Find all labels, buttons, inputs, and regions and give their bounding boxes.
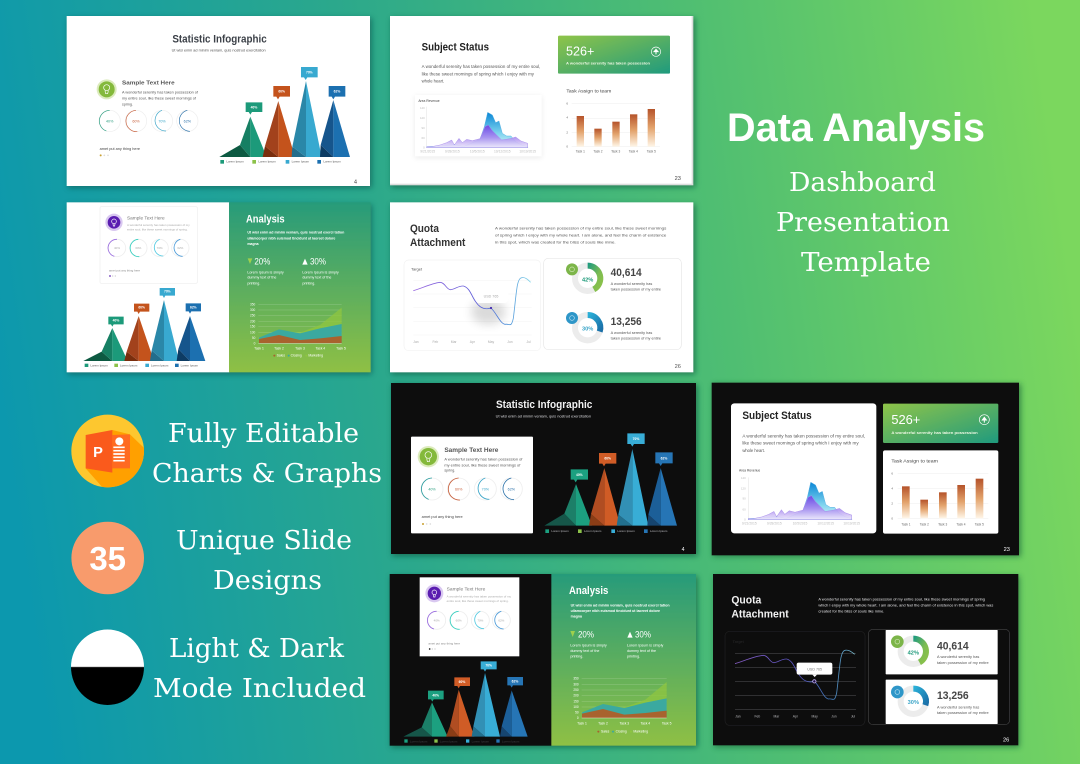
right panel [551,574,696,746]
sample card: 62% [498,618,505,622]
legend [404,739,520,743]
paragraph: A wonderful serenity has taken possession of my entire soul, like these sweet mornings of spring [818,598,985,602]
stat card [883,404,998,443]
area chart card [415,95,542,158]
subheading: Presentation [776,208,950,238]
subtitle: Ut wisi enim ad minim veniam, quis nostrud exercitation [172,49,266,53]
stat: 30%: Lorem Ipsum is simply [302,270,339,274]
bar chart: Task 3 [611,150,620,154]
legend [220,160,341,164]
white content card: 140 [741,476,746,480]
right panel [229,202,371,372]
white card: Sample Text Here [444,448,499,454]
area chart: 150 [250,325,256,329]
sample card: 62% [177,246,184,250]
legend: Lorem Ipsum [551,529,569,533]
stat: 30%: printing. [627,655,640,659]
area chart card: Area Revenue [418,99,440,103]
sample card: amet put any thing here [428,642,460,646]
white card: 70% [482,487,490,491]
donut stats card: A wonderful serenity has [611,331,653,335]
paragraph [495,225,667,245]
legend: Lorem Ipsum [323,160,341,164]
stat card: 526+ [566,43,594,58]
donut stats card: 30% [582,326,593,332]
white content card: 10/5/2015 [793,522,808,526]
feature text: unique slides [176,526,352,596]
line chart card: Jan [413,340,419,344]
paragraph: which I enjoy with my whole heart. I am alone, and feel the charm of existence in this spot, which was [818,604,993,608]
bar chart: 2 [566,130,568,134]
page number: 4 [354,180,357,186]
area chart: 50 [575,710,579,714]
white content card: A wonderful serenity has taken possession of my entire soul, [742,433,865,438]
line chart card: Jul [851,714,855,718]
area chart: 0 [577,716,579,720]
stat: 30%: dummy text of the [627,649,656,653]
slide: Subject Status light [390,16,695,187]
feature text: editable charts: Charts & Graphs [152,459,382,489]
caption with dots [100,147,140,156]
legend [545,529,668,533]
feature text: light and dark: Light & Dark [169,634,344,664]
white content card: Subject Status [742,410,812,422]
area chart: Task 5 [336,346,346,350]
text block: sample text: Sample Text Here [122,81,175,87]
line chart card: Apr [793,714,799,718]
legend: Lorem Ipsum [258,160,276,164]
white card: amet put any thing here [422,515,463,519]
title: Attachment [410,237,466,249]
sample card: A wonderful serenity has taken possession of my [127,223,190,227]
area chart: Task 2 [598,722,608,726]
area chart: Task 1 [254,346,264,350]
donut stats card: 13,256 [611,316,642,328]
bar chart: Task Assign to team [566,89,611,95]
bar chart: Task 1 [576,150,585,154]
area chart: Sales [277,354,285,358]
donut stats card: taken possession of my entire [611,337,661,341]
white card [411,437,533,533]
text block: sample text: my entire soul, like these sweet mornings of [122,96,197,100]
donut stats frame: A wonderful serenity has [937,705,980,709]
text block: sample text: spring. [122,102,133,106]
title: Attachment [731,608,789,620]
stat: 20% [247,257,284,285]
area chart: 100 [250,330,256,334]
donut stats frame: taken possession of my entire [937,661,989,665]
bar chart: 4 [566,116,568,120]
pyramid chart [544,433,677,526]
area chart: Marketing [308,354,323,358]
line chart card: Mar [451,340,457,344]
slide: Statistic Infographic light [67,16,372,188]
area chart: 200 [573,694,579,698]
stat card: A wonderful serenity has taken possession [566,61,651,66]
donut stats card: A wonderful serenity has [611,282,653,286]
line chart card: Feb [754,714,760,718]
feature text: unique slides: Designs [213,566,322,596]
area chart card: 9/28/2015 [445,150,460,154]
stat: 20%: 20% [578,629,594,639]
line chart card: Feb [432,340,438,344]
area chart card: 60 [422,136,425,140]
white card: 60% [455,487,463,491]
slide: Analysis dark [390,574,698,747]
area chart: Sales [601,730,610,734]
sample card [420,577,519,656]
main heading: Data Analysis [727,106,985,150]
legend: Lorem Ipsum [181,363,199,367]
area chart: 300 [573,683,579,687]
area chart card: 90 [422,126,425,130]
white content card: 9/21/2015 [742,522,757,526]
paragraph [422,64,540,83]
title: Quota [410,223,440,235]
pyramid chart: 62% [334,90,340,94]
line chart card: Mar [773,714,780,718]
title: Statistic Infographic [496,399,592,411]
line chart card: Jan [735,714,741,718]
pyramid chart: 60% [278,90,285,94]
stat card: A wonderful serenity has taken possession [891,430,978,435]
caption with dots: amet put any thing here [100,147,140,151]
white content card: 0 [744,518,746,522]
pyramid chart: 70% [306,70,313,74]
bar chart: Task 2 [593,150,603,154]
pyramid chart: 60% [459,680,465,684]
sample card: 70% [477,618,484,622]
stat: 30%: Lorem Ipsum is simply [627,644,664,648]
pyramid chart: 62% [661,456,667,460]
area chart card: 0 [423,146,425,150]
stat: 20%: printing. [247,281,260,285]
page number: 4 [682,547,685,553]
white card: my entire soul, like these sweet mornings of [444,463,521,467]
area chart: Task 4 [641,722,650,726]
bar chart: 0 [566,144,568,148]
slide: Statistic Infographic dark [391,383,698,556]
heading: Analysis: Analysis [246,214,285,226]
slide: Subject Status dark [712,383,1021,557]
analysis paragraph [247,231,344,246]
white card: spring. [444,469,455,473]
progress rings [99,110,198,132]
donut stats card: taken possession of my entire [611,288,661,292]
white content card: 10/19/2015 [843,522,860,526]
line chart card [725,631,865,725]
white card: 40% [428,487,436,491]
stat: 30%: printing. [302,281,315,285]
area chart: Task 3 [620,722,629,726]
bar chart card: Task 5 [975,522,984,526]
subheading: Dashboard [789,168,936,198]
stat card: 526+ [891,412,921,427]
stat: 20%: Lorem Ipsum is simply [570,644,607,648]
stat card [558,36,670,74]
legend: Lorem Ipsum [584,529,602,533]
pyramid chart: 60% [604,457,611,461]
pyramid chart: 60% [138,306,145,310]
pyramid chart: 62% [190,305,197,309]
page number: 26 [1003,738,1009,744]
text block: sample text [122,81,199,106]
paragraph: in this spot, which was created for the bliss of souls like mine. [495,240,616,245]
donut stats frame: 30% [908,700,919,706]
legend: Lorem Ipsum [502,739,520,743]
area chart: Task 1 [577,722,587,726]
title: Subject Status [422,42,489,54]
white content card: like these sweet mornings of spring which I enjoy with my [742,441,860,446]
title: Quota [731,595,762,607]
line chart card [404,260,541,351]
pyramid chart: 40% [251,105,257,109]
line chart card: May [488,340,494,344]
area chart: Closing [616,730,627,734]
donut stats card: 42% [582,277,593,283]
progress rings: 40% [106,119,114,123]
bar chart card: Task 2 [920,522,929,526]
legend: Lorem Ipsum [410,739,428,743]
legend: Lorem Ipsum [151,363,169,367]
area chart: 200 [250,319,256,323]
paragraph: like these sweet mornings of spring which I enjoy with my [422,71,535,76]
icon: 35 badge [71,522,144,594]
area chart card: 120 [420,116,425,120]
title [410,223,466,249]
white card: 62% [508,487,516,491]
legend: Lorem Ipsum [292,160,310,164]
donut stats frame: A wonderful serenity has [937,655,980,659]
area chart card: 10/19/2015 [519,150,536,154]
icon: 35 badge: 35 [89,540,126,577]
page number: 26 [675,364,681,370]
sample card: Sample Text Here [447,586,486,592]
legend [85,363,199,367]
white content card: whole heart. [742,448,765,453]
feature text: editable charts [152,419,382,489]
legend: Lorem Ipsum [472,739,490,743]
area chart: 350 [573,677,579,681]
pyramid chart: 70% [633,437,639,441]
title: Statistic Infographic [172,33,267,45]
area chart: 300 [250,308,256,312]
area chart: Marketing [633,730,648,734]
line chart card: Jun [507,340,513,344]
analysis paragraph: Ut wisi enim ad minim veniam, quis nostrud exerci tation [571,603,670,607]
sample card: entire soul, like these sweet mornings of spring. [127,227,188,231]
analysis paragraph: ullamcorper nibh euismod tincidunt ut laoreet dolore [571,609,660,613]
area chart: 0 [254,341,256,345]
line chart card: USD 765 [484,295,498,299]
area chart: 350 [250,302,256,306]
stat: 30%: dummy text of the [302,276,331,280]
sample card: 40% [434,618,440,622]
stat: 20%: 20% [254,257,270,267]
line chart card: May [812,714,818,718]
bar chart card: 6 [891,472,893,476]
subheading [776,168,950,278]
page number: 23 [1004,547,1010,553]
paragraph: whole heart. [422,78,444,83]
area chart: Task 3 [295,346,305,350]
area chart: Task 2 [274,346,284,350]
line chart card: Target [411,266,423,271]
line chart card: Jul [527,340,531,344]
feature text: light and dark [153,634,366,704]
stat: 30% [302,257,339,285]
pyramid chart: 62% [512,680,518,684]
pyramid chart: 40% [113,319,119,323]
area chart: 250 [250,314,256,318]
stat: 20% [570,629,607,659]
sample card [100,207,197,283]
bar chart [566,89,660,154]
pyramid chart: 70% [485,664,492,668]
line chart card: Jun [831,714,837,718]
subheading: Template [801,248,931,278]
bar chart card [883,450,998,534]
line chart card: Apr [470,340,476,344]
area chart [573,677,672,734]
line chart card: USD 765 [807,668,822,672]
sample card: 40% [114,246,120,250]
area chart card: 10/5/2015 [470,150,485,154]
area chart: 250 [573,688,579,692]
donut stats frame: 42% [908,650,919,656]
subtitle: Ut wisi enim ad minim veniam, quis nostrud exercitation [496,415,591,419]
pyramid chart: 40% [432,693,439,697]
text block: sample text: A wonderful serenity has taken possession of [122,90,199,94]
analysis paragraph: magna [571,615,582,619]
sample card: A wonderful serenity has taken possession of my [447,595,512,599]
area chart card: 9/21/2015 [420,150,435,154]
slide: Analysis light [67,202,372,374]
sample card: 70% [157,246,163,250]
sample card: amet put any thing here [109,269,140,273]
legend: Lorem Ipsum [650,529,668,533]
donut stats frame [868,629,1010,725]
bar chart: Task 5 [647,150,656,154]
area chart card: 10/12/2015 [494,150,511,154]
donut stats frame: 40,614 [937,641,969,653]
stat: 20%: Lorem Ipsum is simply [247,270,284,274]
paragraph [818,598,993,614]
stat: 20%: printing. [570,655,583,659]
analysis paragraph: Ut wisi enim ad minim veniam, quis nostrud exerci tation [247,231,344,235]
white content card: 10/12/2015 [817,522,834,526]
progress rings: 70% [158,119,166,123]
donut stats card: 40,614 [611,267,642,279]
analysis paragraph: ullamcorper nibh euismod tincidunt ut laoreet dolore [247,236,335,240]
bar chart: Task 4 [629,150,638,154]
sample card: entire soul, like these sweet mornings of spring. [447,599,509,603]
icon: PowerPoint: P [93,445,103,461]
pyramid chart [83,288,205,361]
paragraph: A wonderful serenity has taken possession of my entire soul, [422,64,540,69]
progress rings: 62% [184,119,192,123]
bar chart card: 4 [891,486,893,490]
analysis paragraph: magna [247,242,259,246]
paragraph: created for the bliss of souls like mine. [818,610,884,614]
area chart: 50 [252,336,256,340]
paragraph: of spring which I enjoy with my whole heart. I am alone, and feel the charm of existence [495,232,667,237]
bar chart card: Task 1 [901,522,911,526]
slide: Quota Attachment dark [713,574,1020,747]
donut stats frame: 13,256 [937,690,969,702]
analysis paragraph [571,603,670,619]
pyramid chart [219,67,350,157]
stat: 30% [627,629,664,659]
white card: A wonderful serenity has taken possession of [444,458,523,462]
bar chart card: 2 [891,502,893,506]
legend: Lorem Ipsum [617,529,635,533]
stat: 30%: 30% [635,629,651,639]
area chart: Task 4 [316,346,325,350]
stat: 20%: dummy text of the [247,276,276,280]
donut stats frame: taken possession of my entire [937,711,989,715]
bar chart card: 0 [891,516,893,520]
paragraph: A wonderful serenity has taken possession of my entire soul, like these sweet mornings [495,225,666,230]
bar chart: 6 [566,102,568,106]
bar chart card: Task 4 [956,522,966,526]
icon: PowerPoint [71,414,144,488]
white content card: 60 [743,507,746,511]
pyramid chart: 70% [164,290,171,294]
area chart: 100 [573,705,579,709]
legend: Lorem Ipsum [226,160,244,164]
white content card: 90 [743,497,746,501]
area chart: Closing [291,354,302,358]
sample card: Sample Text Here [127,215,165,221]
bar chart card: Task Assign to team [891,458,938,464]
heading: Analysis: Analysis [569,585,608,597]
area chart card: 140 [420,106,425,110]
pyramid chart: 40% [576,473,583,477]
sample card: 60% [456,618,462,622]
progress rings: 60% [132,119,140,123]
area chart: Task 5 [662,722,672,726]
white content card: Area Revenue [739,469,760,473]
white content card: 9/28/2015 [767,522,782,526]
icon: light bulb [97,79,117,99]
line chart card: Target [733,639,745,644]
area chart [250,302,346,358]
pyramid chart [403,661,528,737]
donut stats card [544,258,681,350]
bar chart card: Task 3 [938,522,947,526]
area chart: 150 [573,699,579,703]
title [731,595,789,620]
white content card [731,403,876,533]
icon: light and dark circle [71,630,144,705]
slide: Quota Attachment light [390,202,695,374]
feature text: editable charts: Fully Editable [168,419,359,449]
legend: Lorem Ipsum [440,739,458,743]
legend: Lorem Ipsum [120,363,138,367]
page number: 23 [675,176,681,182]
stat: 30%: 30% [310,257,326,267]
sample card: 60% [135,246,142,250]
feature text: light and dark: Mode Included [153,674,366,704]
legend: Lorem Ipsum [90,363,108,367]
white content card: 120 [741,486,746,490]
feature text: unique slides: Unique Slide [176,526,352,556]
stat: 20%: dummy text of the [570,649,599,653]
